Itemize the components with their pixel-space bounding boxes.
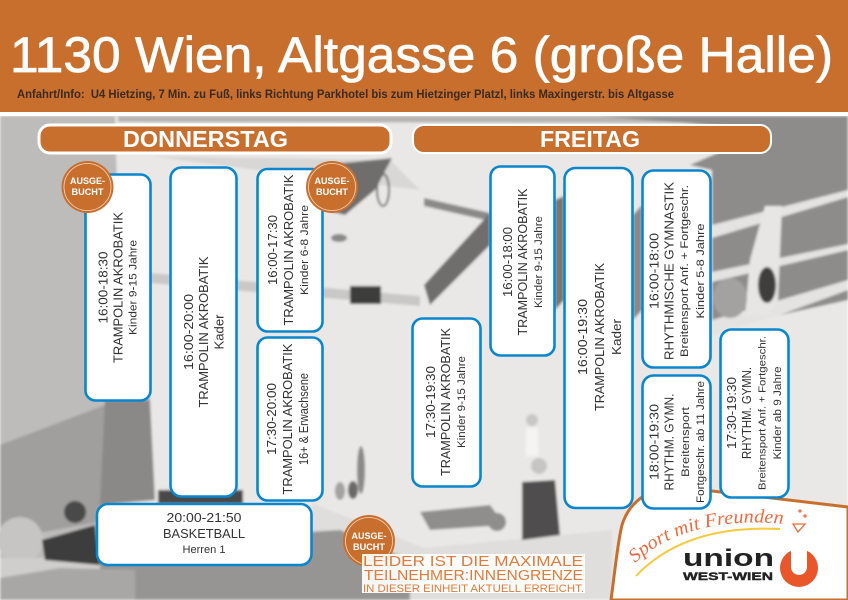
card: Freitag 17:30-19:30: [412, 318, 480, 486]
card: Freitag 16:00-18:00: Kinder 9-15 Jahre: [533, 216, 545, 308]
card: Donnerstag 17:30-20:00: 16+ & Erwachsene: [297, 373, 311, 465]
legend notice: LEIDER IST DIE MAXIMALE: [363, 553, 583, 570]
card: Freitag 16:00-18:00: TRAMPOLIN AKROBATIK: [516, 188, 530, 336]
header band: [0, 0, 848, 112]
badge: ausgebucht legend: [343, 515, 395, 567]
card: Freitag 18:00-19:30: Breitensport: [680, 407, 692, 477]
card: Freitag 17:30-19:30 Rhythm. Gymn.: RHYTHM. GYMN.: [740, 367, 754, 459]
card: Donnerstag 16:00-17:30: TRAMPOLIN AKROBATIK: [282, 174, 296, 326]
card: Freitag 17:30-19:30 Rhythm. Gymn.: 17:30-19:30: [725, 377, 739, 449]
card: Donnerstag 16:00-18:30: TRAMPOLIN AKROBATIK: [112, 211, 126, 363]
card: Freitag 16:00-19:30: 16:00-19:30: [576, 299, 590, 375]
card: Donnerstag 16:00-18:30: 16:00-18:30: [96, 251, 110, 324]
card: Freitag 18:00-19:30: [642, 376, 710, 508]
card: Basketball: 20:00-21:50: [166, 511, 242, 525]
card: Donnerstag 16:00-17:30: Kinder 6-8 Jahre: [299, 205, 311, 295]
card: Donnerstag 16:00-18:30: [86, 174, 150, 400]
badge: ausgebucht left: BUCHT: [72, 187, 104, 198]
card: Freitag 17:30-19:30: 17:30-19:30: [424, 366, 438, 438]
card: Freitag 16:00-18:00 Rhythmische Gymnastik: Kinder 5-8 Jahre: [695, 224, 707, 318]
card: Freitag 16:00-18:00 Rhythmische Gymnastik: 16:00-18:00: [648, 233, 662, 309]
card: Freitag 18:00-19:30: Fortgeschr. ab 11 Jahre: [695, 381, 707, 503]
logo panel background: [611, 491, 848, 600]
card: Freitag 18:00-19:30: RHYTHM. GYMN.: [662, 394, 676, 490]
badge: ausgebucht middle: [306, 161, 358, 213]
card: Freitag 16:00-18:00 Rhythmische Gymnastik: RHYTHMISCHE GYMNASTIK: [662, 181, 676, 360]
card: Donnerstag 16:00-20:00: Kader: [212, 315, 226, 349]
card: Freitag 16:00-18:00: [490, 166, 554, 356]
card: Basketball: BASKETBALL: [163, 527, 245, 541]
slogan: Sport mit Freunden: [630, 509, 807, 577]
white divider under header: [0, 112, 848, 116]
logo: Union West-Wien: WEST-WIEN: [683, 571, 773, 583]
logo: Union West-Wien: [683, 545, 818, 587]
legend notice: IN DIESER EINHEIT AKTUELL ERREICHT.: [363, 583, 584, 595]
card: Freitag 17:30-19:30: Kinder 9-15 Jahre: [456, 356, 468, 448]
card: Donnerstag 17:30-20:00: [258, 338, 322, 500]
badge: ausgebucht left: [62, 161, 114, 213]
card: Freitag 16:00-19:30: Kader: [610, 319, 624, 355]
card: Freitag 17:30-19:30 Rhythm. Gymn.: Breitensport Anf. + Fortgeschr.: [758, 336, 768, 490]
card: Freitag 16:00-18:00 Rhythmische Gymnastik: [642, 170, 710, 368]
heading: Freitag: FREITAG: [540, 126, 640, 152]
card: Donnerstag 16:00-20:00: TRAMPOLIN AKROBATIK: [197, 256, 211, 408]
card: Freitag 16:00-19:30: [564, 168, 632, 508]
card: Donnerstag 17:30-20:00: 17:30-20:00: [265, 383, 279, 455]
card: Freitag 18:00-19:30: 18:00-19:30: [648, 404, 662, 480]
slogan: Sport mit Freunden: Sport mit Freunden: [630, 509, 783, 562]
heading: Donnerstag: DONNERSTAG: [123, 126, 288, 152]
icon: smiley: [793, 510, 806, 532]
card: Donnerstag 16:00-17:30: [258, 169, 322, 332]
card: Freitag 16:00-18:00 Rhythmische Gymnastik: Breitensport Anf. + Fortgeschr.: [679, 185, 691, 357]
badge: ausgebucht legend: BUCHT: [353, 542, 385, 553]
card: Freitag 17:30-19:30 Rhythm. Gymn.: Kinder ab 9 Jahre: [772, 367, 784, 459]
badge: ausgebucht legend: AUSGE-: [352, 531, 386, 542]
legend notice: [362, 553, 585, 595]
badge: ausgebucht middle: BUCHT: [316, 187, 348, 198]
icon: U circle: [780, 545, 818, 587]
card: Donnerstag 16:00-20:00: 16:00-20:00: [182, 294, 196, 370]
directions text: Anfahrt/Info: U4 Hietzing, 7 Min. zu Fuß, links Richtung Parkhotel bis zum Hietzinger Platzl, links Maxingerstr. bis Altgasse: [17, 89, 674, 101]
card: Donnerstag 16:00-20:00: [170, 168, 236, 496]
title: 1130 Wien, Altgasse 6 (große Halle): [10, 27, 833, 83]
legend notice: TEILNEHMER:INNENGRENZE: [364, 567, 583, 584]
card: Basketball: Herren 1: [182, 544, 226, 556]
card: Basketball: [97, 504, 312, 565]
card: Freitag 17:30-19:30 Rhythm. Gymn.: [720, 330, 788, 498]
card: Freitag 16:00-19:30: TRAMPOLIN AKROBATIK: [593, 262, 607, 411]
card: Freitag 17:30-19:30: TRAMPOLIN AKROBATIK: [439, 327, 453, 476]
heading: Freitag: [413, 125, 771, 153]
card: Donnerstag 16:00-17:30: 16:00-17:30: [266, 215, 280, 285]
card: Donnerstag 16:00-18:30: Kinder 9-15 Jahre: [128, 240, 140, 335]
card: Donnerstag 17:30-20:00: TRAMPOLIN AKROBATIK: [281, 343, 295, 494]
logo: Union West-Wien: union: [683, 545, 774, 572]
badge: ausgebucht left: AUSGE-: [70, 176, 105, 187]
badge: ausgebucht middle: AUSGE-: [314, 176, 350, 187]
heading: Donnerstag: [39, 125, 391, 153]
card: Freitag 16:00-18:00: 16:00-18:00: [501, 227, 515, 297]
